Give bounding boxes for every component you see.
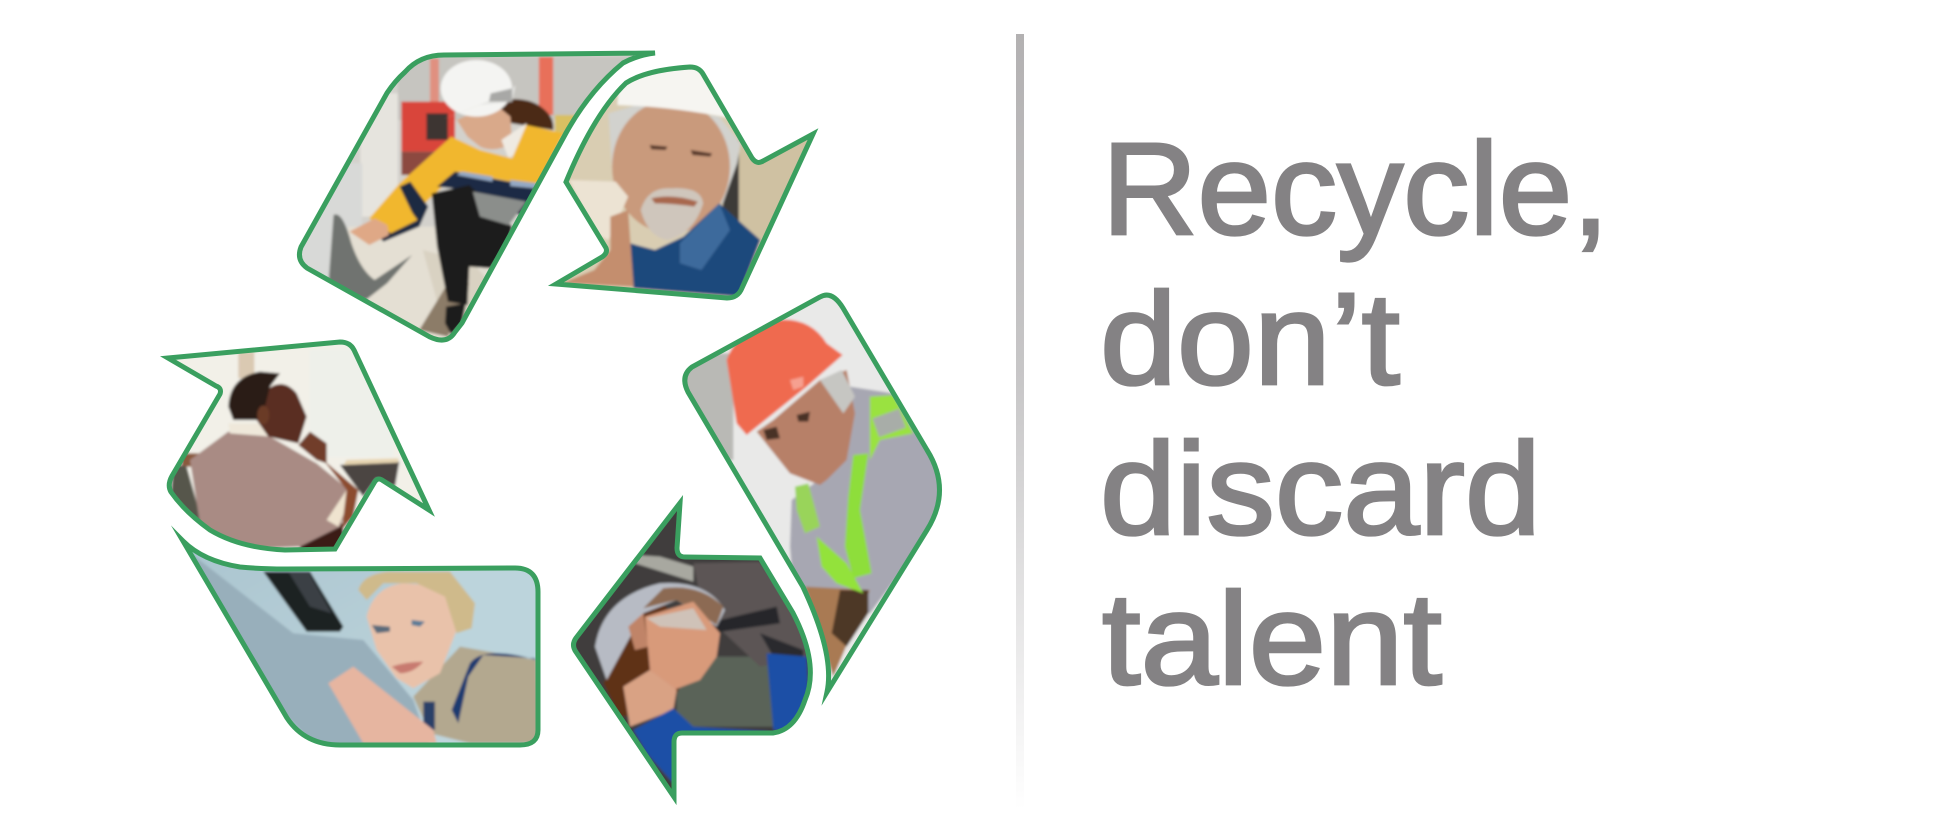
arrow outline	[574, 503, 810, 797]
vertical divider	[1016, 34, 1024, 810]
arrow outline	[168, 342, 429, 550]
arrow outline	[685, 295, 940, 692]
headline text: discard	[1100, 415, 1541, 562]
arrow outline	[299, 53, 655, 340]
headline text: don’t	[1100, 265, 1400, 412]
headline text: Recycle,	[1102, 115, 1609, 262]
panel: blonde woman inspecting metal surface	[170, 530, 543, 750]
panel: man in orange hard hat and green vest	[683, 290, 950, 707]
arrow outline	[556, 67, 813, 298]
recycling symbol made of six photo arrows	[150, 30, 950, 800]
panel: older man in white hard hat and blue plaid shirt	[544, 60, 830, 303]
panel: man at laptop in patterned polo	[150, 333, 443, 553]
headline text	[1100, 115, 1609, 712]
headline text: talent	[1102, 565, 1442, 712]
arrow outline	[183, 541, 538, 745]
panel: woman in white hard hat and yellow jacket	[296, 50, 656, 343]
panel: woman in safety glasses at machinery	[570, 493, 813, 800]
